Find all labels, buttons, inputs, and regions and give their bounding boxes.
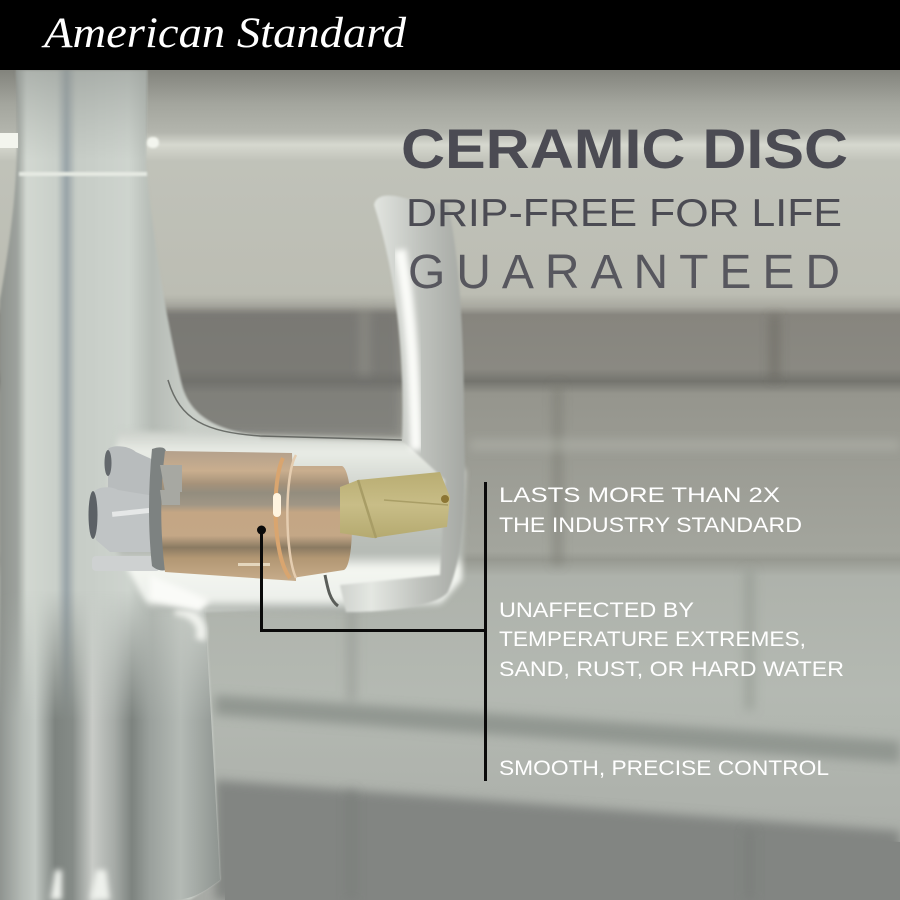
benefit: unaffected: SAND, RUST, OR HARD WATER: [499, 657, 844, 681]
callout leader lines: [257, 482, 487, 781]
benefit: lasts longer: [499, 483, 802, 537]
faucet lever handle: [340, 195, 465, 612]
benefit: lasts longer: THE INDUSTRY STANDARD: [499, 513, 802, 537]
subheading: guaranteed: GUARANTEED: [408, 246, 840, 299]
title block: [401, 117, 848, 299]
ceramic disc cartridge: [88, 446, 450, 581]
subheading: drip-free for life: DRIP-FREE FOR LIFE: [406, 192, 842, 235]
faucet hub: [100, 380, 465, 612]
brass cylinder: [160, 451, 352, 581]
benefit list: [499, 483, 844, 780]
benefit: lasts longer: LASTS MORE THAN 2X: [499, 483, 780, 507]
benefit: smooth control: SMOOTH, PRECISE CONTROL: [499, 756, 829, 780]
benefit: unaffected: UNAFFECTED BY: [499, 598, 694, 622]
benefit: unaffected: [499, 598, 844, 681]
logo: American Standard wordmark: American Standard: [41, 10, 407, 57]
cartridge plastic base: [88, 446, 166, 571]
heading: ceramic disc: CERAMIC DISC: [401, 117, 848, 180]
logo band: [0, 0, 900, 70]
brass stem: [340, 472, 450, 538]
benefit: unaffected: TEMPERATURE EXTREMES,: [499, 627, 806, 651]
faucet body: [0, 70, 260, 900]
